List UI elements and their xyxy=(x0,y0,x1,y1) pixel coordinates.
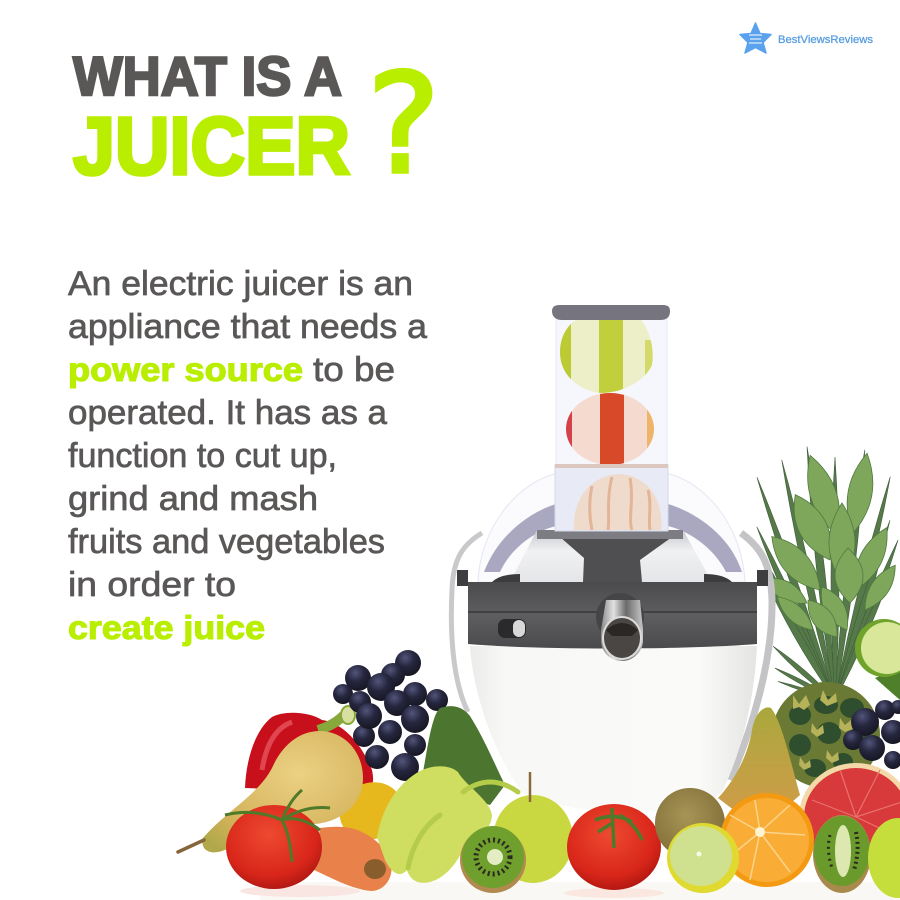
grapes left xyxy=(333,650,448,781)
sliced kiwi front xyxy=(460,826,526,893)
pineapple inner leaves xyxy=(760,451,900,643)
orange half xyxy=(720,793,814,887)
body line 2: appliance that needs a xyxy=(68,308,427,346)
upper feed chute xyxy=(556,318,667,466)
title line: what is a: WHAT IS A xyxy=(73,45,342,107)
inner cone xyxy=(510,530,712,582)
carrot xyxy=(314,827,392,891)
dark control band xyxy=(468,574,757,648)
collar rim xyxy=(555,464,668,468)
whole kiwi xyxy=(655,788,725,858)
pineapple thin outer leaves xyxy=(754,446,900,702)
juicer left handle xyxy=(451,533,482,712)
title line: juicer: JUICER xyxy=(73,101,350,192)
pepper stem xyxy=(318,706,355,730)
grapes right xyxy=(843,700,900,769)
illustration: pineapple xyxy=(754,446,900,788)
icon: blue star xyxy=(740,23,771,53)
highlight: create juice: create juice xyxy=(68,609,265,646)
illustration: juicer xyxy=(451,305,772,812)
body line 1: An electric juicer is an xyxy=(68,265,413,303)
pineapple fruit body xyxy=(772,682,880,788)
feed lid xyxy=(552,305,670,320)
lower collar xyxy=(555,465,668,531)
body line 6: grind and mash xyxy=(68,480,318,518)
grapefruit half xyxy=(799,763,900,871)
sliced kiwi right xyxy=(813,815,871,893)
left clamp xyxy=(457,570,468,586)
title xyxy=(73,44,440,205)
avocado xyxy=(423,706,505,805)
body text xyxy=(68,265,427,646)
green apple in chute xyxy=(560,320,653,393)
power switch xyxy=(498,619,526,638)
highlight: power source: power source xyxy=(68,351,303,388)
juicer right handle xyxy=(730,533,772,780)
yellow-green pepper xyxy=(377,766,518,883)
body line 7: fruits and vegetables xyxy=(68,523,385,561)
right clamp xyxy=(757,570,768,586)
body line 3 end: to be xyxy=(313,351,395,389)
cucumber slice xyxy=(855,619,900,700)
logo: BestViewsReviews xyxy=(740,23,873,53)
juicer white base xyxy=(470,646,757,812)
illustration: fruit pile xyxy=(178,619,900,898)
peeled orange xyxy=(574,474,661,530)
lime-green apple xyxy=(868,818,900,898)
lime half xyxy=(667,823,739,893)
lemon xyxy=(330,772,412,850)
body line 8: in order to xyxy=(68,566,236,604)
transparent dome xyxy=(478,473,745,582)
red bell pepper xyxy=(245,713,373,790)
green apple xyxy=(493,772,573,883)
question mark: ? xyxy=(367,44,440,205)
body line 4: operated. It has as a xyxy=(68,394,387,432)
juice spout xyxy=(596,593,644,661)
right pear xyxy=(718,707,800,830)
left tomato xyxy=(225,790,330,889)
logo wordmark: BestViewsReviews xyxy=(778,34,873,46)
inner arms xyxy=(484,504,556,572)
large pear xyxy=(178,731,363,852)
red apple in chute xyxy=(566,393,654,464)
body line 5: function to cut up, xyxy=(68,437,337,475)
floor reflection xyxy=(240,882,900,900)
right tomato xyxy=(567,804,661,890)
